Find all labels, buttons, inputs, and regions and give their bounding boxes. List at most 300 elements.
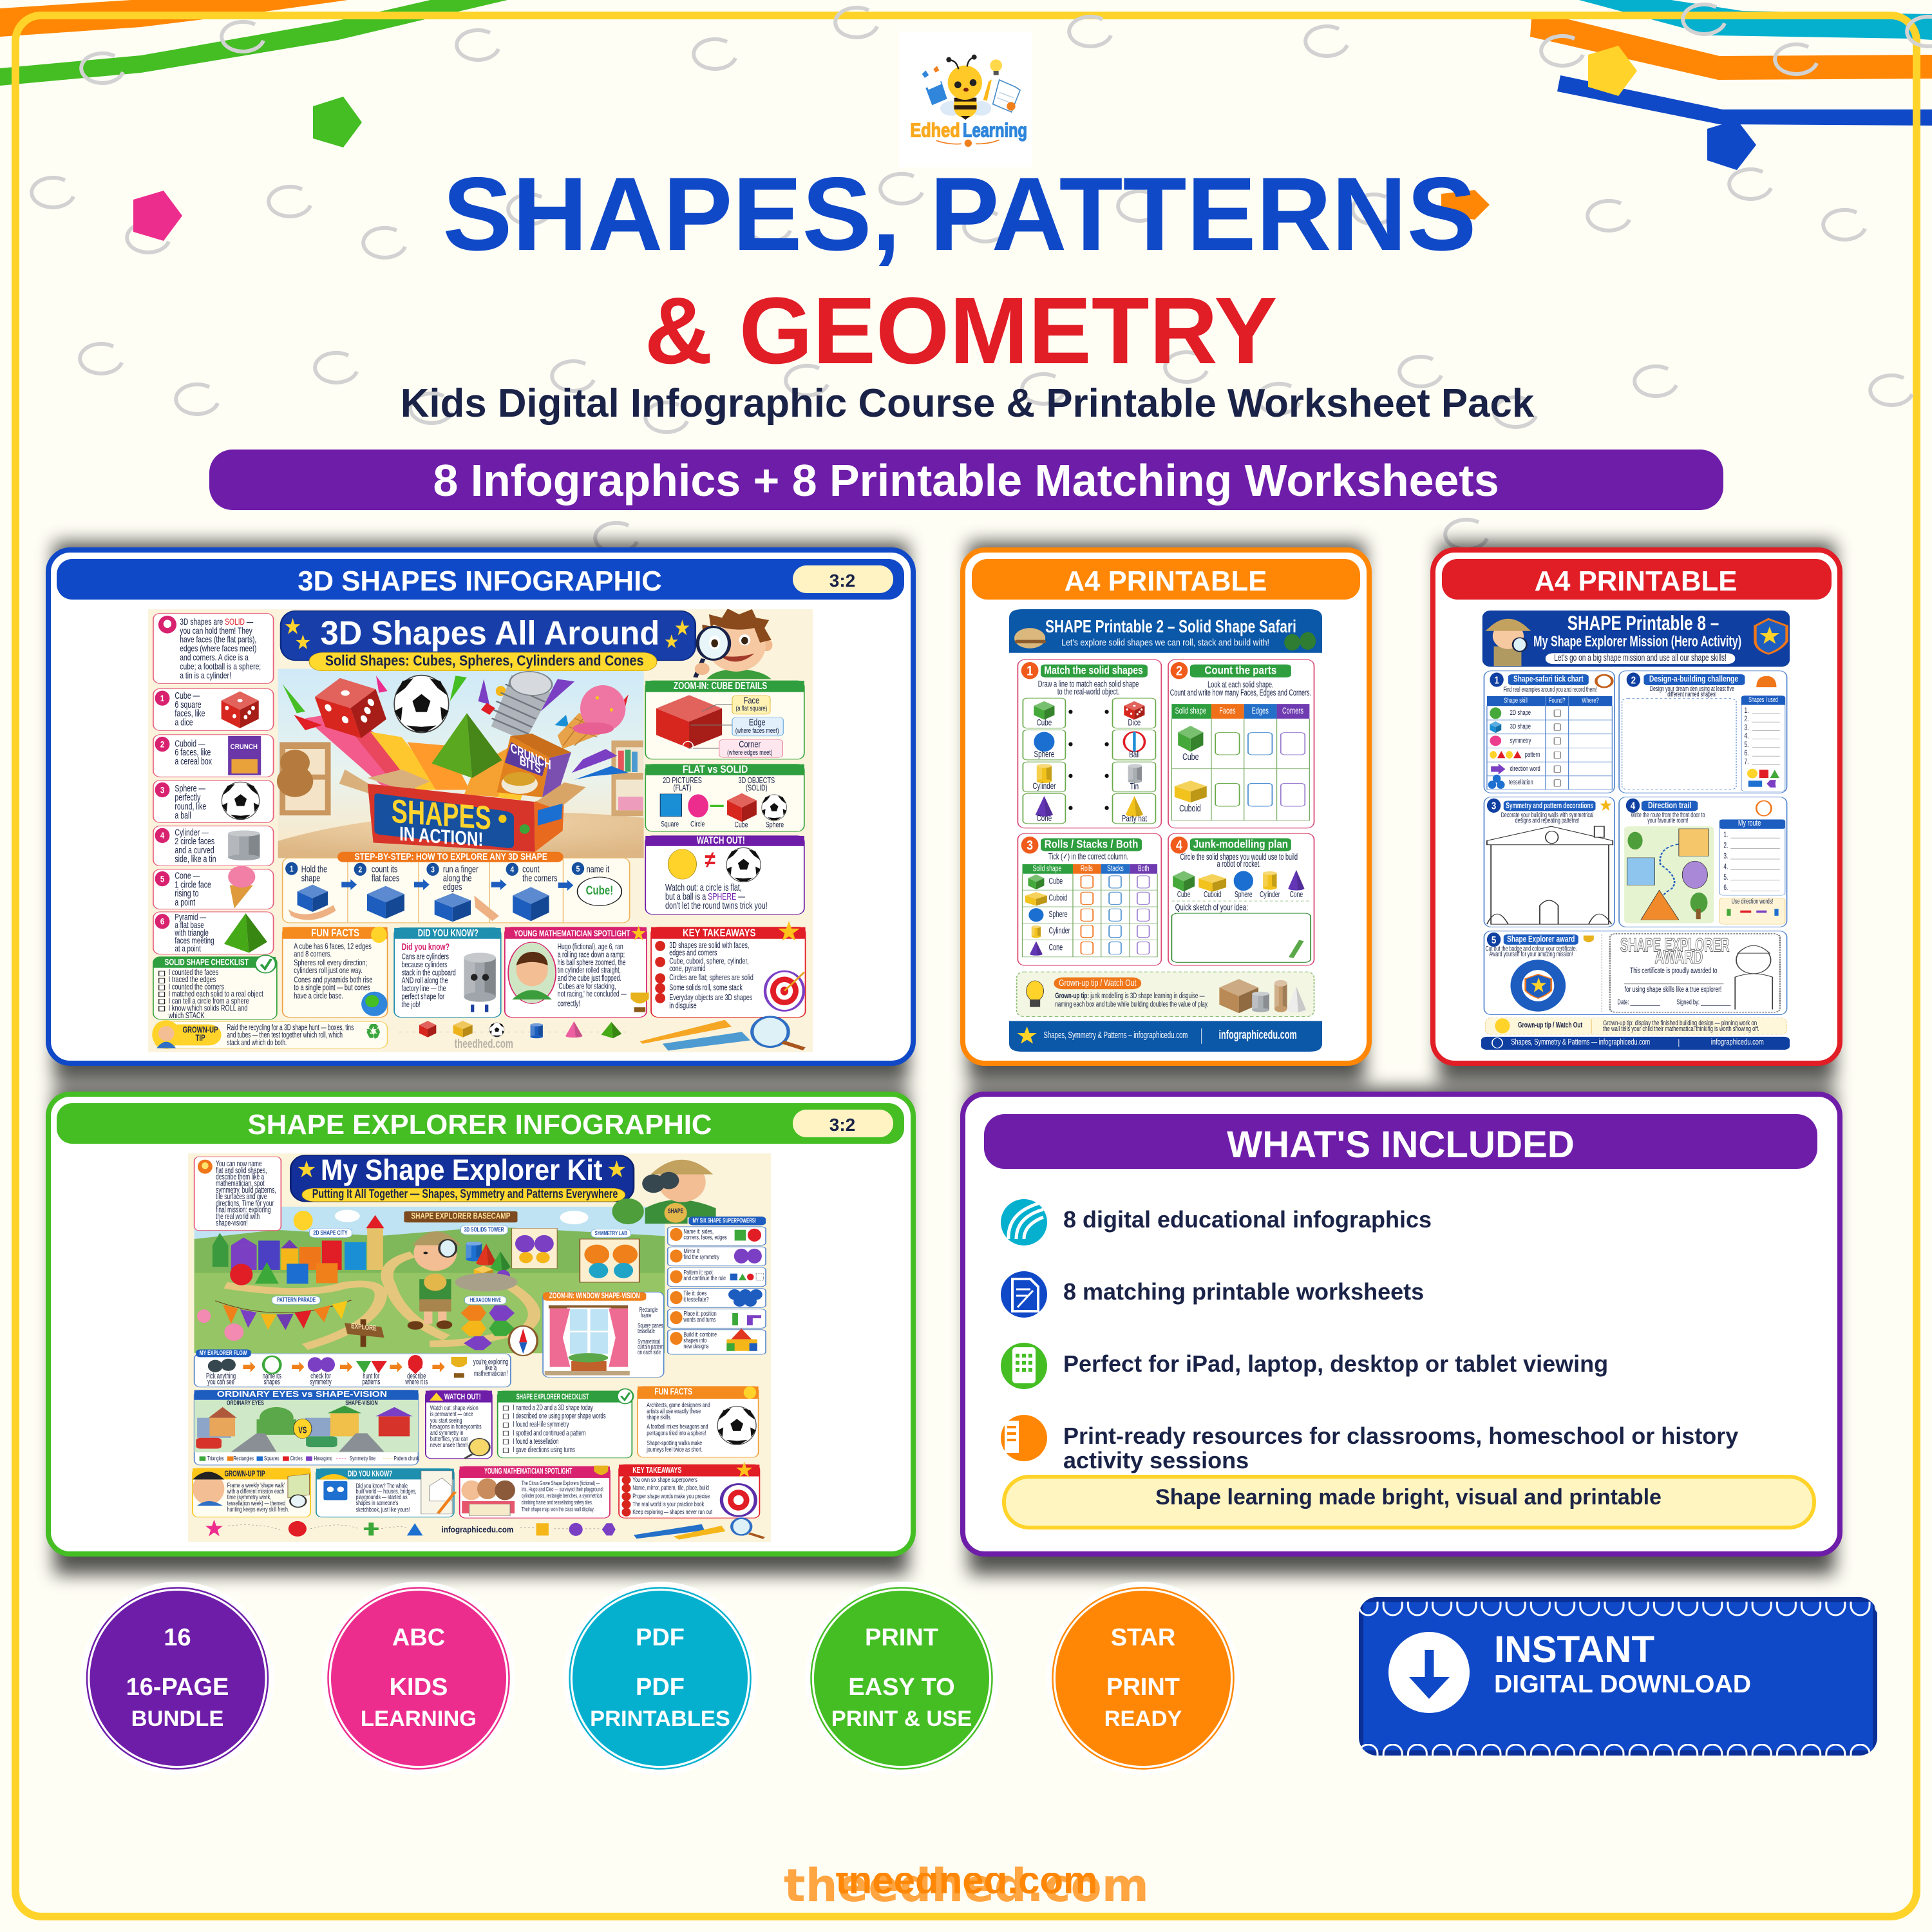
illustration: hexagon hive xyxy=(460,1305,515,1350)
task 1: tick chart: Found? xyxy=(1549,697,1566,704)
icon: tablet xyxy=(1001,1343,1047,1389)
task 4: direction trail: 4 xyxy=(1631,801,1636,812)
panel: spotlight: a rolling race down a ramp: xyxy=(558,951,625,960)
item text: 8 matching printable worksheets xyxy=(1063,1278,1424,1305)
task 5: explorer award: AWARD xyxy=(1654,946,1703,968)
panel: watch out: butterflies, you can xyxy=(430,1435,468,1443)
panel: ordinary eyes vs shape-vision: Pattern chunk xyxy=(394,1455,419,1462)
badge: print ready xyxy=(1046,1582,1240,1775)
task 2: count the parts: 2 xyxy=(1176,663,1182,679)
panel: explorer flow: shapes xyxy=(264,1378,280,1387)
panel: cube: 6 square xyxy=(175,699,202,710)
icon: wifi arcs xyxy=(1001,1199,1047,1245)
panel: explorer flow: symmetry xyxy=(310,1378,332,1387)
task 4: direction trail: your favourite room! xyxy=(1647,817,1689,824)
task 4: junk modelling plan: Circle the solid shapes you would use to build xyxy=(1180,852,1298,862)
panel: six shape superpowers: Pattern it: spot xyxy=(683,1269,713,1276)
panel: fun facts: Cones and pyramids both rise xyxy=(294,976,372,985)
task 3: rolls, stacks, both: Cuboid xyxy=(1049,893,1067,903)
badge: easy to print: EASY TO xyxy=(848,1674,955,1701)
panel: spotlight: correctly! xyxy=(558,999,580,1009)
panel: six shape superpowers: Name it: sides, xyxy=(683,1227,714,1235)
task 3: symmetry decorations: designs and repeating patterns! xyxy=(1515,817,1579,824)
panel: flat vs solid: 2D PICTURES xyxy=(663,777,702,785)
task 4: direction trail: Write the route from the front door to xyxy=(1631,811,1705,819)
panel: fun facts: pentagons tiled into a sphere! xyxy=(647,1429,706,1437)
task 3: symmetry decorations: Symmetry and pattern decorations xyxy=(1506,801,1593,810)
card header xyxy=(57,559,904,600)
panel: intro fact: cube; a football is a sphere; xyxy=(180,661,261,672)
panel: step-by-step: 1 xyxy=(290,865,294,874)
worksheet footer: infographicedu.com xyxy=(1711,1037,1764,1046)
illustration: explorer with binoculars: SHAPE xyxy=(668,1207,683,1215)
panel: intro fact: 3D shapes are SOLID — xyxy=(180,616,253,627)
panel: checklist: I found a tessellation xyxy=(513,1437,558,1446)
panel: step-by-step: flat faces xyxy=(372,873,400,884)
panel: intro fact: and corners. A dice is a xyxy=(180,652,249,663)
panel: intro fact: describe them like a xyxy=(216,1173,264,1182)
badge: pdf printables: PDF xyxy=(636,1674,685,1701)
grown-up tip xyxy=(1485,1018,1787,1034)
panel: grown-up tip: Raid the recycling for a 3D shape hunt — boxes, tins xyxy=(227,1023,354,1032)
panel: flat vs solid: (FLAT) xyxy=(674,784,691,793)
grown-up tip: Grown-up tip / Watch Out xyxy=(1059,978,1137,988)
badge: print ready: READY xyxy=(1104,1707,1182,1731)
panel: spotlight: and the cube just flopped. xyxy=(558,974,621,983)
task 2: design a building: 2 xyxy=(1631,675,1636,687)
ratio pill: 3:2 xyxy=(829,571,855,591)
panel: explorer flow: describe xyxy=(407,1372,426,1381)
panel: zoom-in window: Rectangle xyxy=(639,1305,658,1313)
panel: key takeaways: You own six shape superpowers xyxy=(632,1476,697,1484)
task 4: junk modelling plan: Sphere xyxy=(1235,891,1253,900)
panel: explorer flow: you're exploring xyxy=(473,1358,508,1367)
icon: printed resources xyxy=(1001,1415,1047,1461)
worksheet thumbnail xyxy=(1481,611,1790,1050)
panel: did you know xyxy=(316,1469,455,1517)
panel: spotlight: The Citrus Grove Shape Explorers (fictional) — xyxy=(522,1480,600,1486)
footer shapes trail xyxy=(399,1017,804,1051)
footer shapes trail xyxy=(205,1519,764,1540)
panel: step-by-step: name it xyxy=(587,864,610,875)
panel: six shape superpowers: find the symmetry xyxy=(683,1253,719,1261)
panel: cone: 5 xyxy=(160,874,164,884)
panel: step-by-step: 3 xyxy=(431,866,435,875)
task 1: match the solid shapes: Cylinder xyxy=(1032,781,1056,791)
panel: checklist: I found real-life symmetry xyxy=(513,1421,569,1429)
panel: explorer flow: hunt for xyxy=(363,1372,380,1381)
grown-up tip: Grown-up tip / Watch Out xyxy=(1518,1021,1583,1030)
panel: cube: Cube — xyxy=(175,690,200,701)
task 2: count the parts: Corners xyxy=(1282,706,1303,715)
illustration: cereal box xyxy=(497,734,571,797)
title banner: My Shape Explorer Kit xyxy=(321,1154,603,1187)
panel: step-by-step: run a finger xyxy=(443,864,478,875)
panel: spotlight: Hugo (fictional), age 6, ran xyxy=(558,943,623,952)
worksheet footer xyxy=(1009,1021,1322,1052)
panel: grown-up tip: time (symmetry week, xyxy=(227,1493,271,1501)
panel: grown-up tip: hunting keeps every skill fresh. xyxy=(227,1506,289,1513)
task 2: count the parts: Count and write how many Faces, Edges and Corners. xyxy=(1170,688,1311,697)
panel: spotlight: cylinder posts, rectangle benches, a symmetrical xyxy=(522,1492,603,1499)
panel: six shape superpowers: corners, faces, edges xyxy=(683,1233,727,1241)
panel: checklist: I named a 2D and a 3D shape today xyxy=(513,1404,593,1412)
panel: step-by-step: edges xyxy=(443,881,462,893)
task 1: match the solid shapes: Ball xyxy=(1129,750,1140,760)
panel: key takeaways: Proper shape words make you precise xyxy=(632,1492,710,1500)
worksheet footer: Shapes, Symmetry & Patterns – infographicedu.com xyxy=(1044,1030,1188,1040)
panel: intro fact xyxy=(153,613,274,683)
panel: key takeaways: Circles are flat; spheres are solid xyxy=(669,973,753,982)
panel: sphere: a ball xyxy=(175,810,191,821)
camp scene: 3D SOLIDS TOWER xyxy=(464,1226,504,1233)
panel: zoom-in window: Symmetrical xyxy=(638,1338,660,1345)
logo: Edhed Learning bee: Edhed xyxy=(910,119,960,141)
panel: pyramid: Pyramid — xyxy=(175,912,206,922)
task 1: tick chart: 3D shape xyxy=(1510,723,1531,730)
panel: cube: faces, like xyxy=(175,708,205,719)
panel: intro fact: symmetry, build patterns, xyxy=(216,1186,276,1195)
callout banner: Shape learning made bright, visual and printable xyxy=(1155,1485,1662,1510)
panel: key takeaways: in disguise xyxy=(669,1001,697,1010)
panel: step-by-step: the corners xyxy=(522,873,558,884)
task 2: design a building: 4. xyxy=(1745,732,1748,741)
panel: sphere: 3 xyxy=(160,785,164,795)
illustration: explorer with binoculars xyxy=(612,1160,716,1224)
panel: cuboid: 2 xyxy=(160,739,164,750)
icon: worksheet xyxy=(1001,1271,1047,1318)
panel: spotlight: Their shape map won the class wall display. xyxy=(522,1506,594,1513)
task 5: explorer award: 5 xyxy=(1492,935,1496,946)
panel: cube: a dice xyxy=(175,717,193,728)
panel: six shape superpowers: words and turns xyxy=(683,1316,716,1323)
panel: ordinary eyes vs shape-vision: Hexagons xyxy=(314,1455,332,1462)
panel: cube: 1 xyxy=(160,694,164,703)
panel: flat vs solid: Square xyxy=(661,821,679,829)
panel: did you know: DID YOU KNOW? xyxy=(348,1470,392,1479)
panel: pyramid: a flat base xyxy=(175,920,204,930)
panel: zoom-in cube details: (where edges meet) xyxy=(727,749,772,756)
title xyxy=(442,156,1477,384)
task 4: direction trail: 2. xyxy=(1723,842,1728,850)
task 3: rolls, stacks, both: Sphere xyxy=(1049,909,1068,919)
panel: zoom-in window: ZOOM-IN: WINDOW SHAPE-VISION xyxy=(549,1291,640,1300)
panel: spotlight xyxy=(460,1466,610,1518)
panel: fun facts: to a single point — but cones xyxy=(294,983,370,992)
task 1: tick chart: Shape skill xyxy=(1504,697,1528,704)
worksheet header xyxy=(1009,609,1322,653)
title: SHAPES, PATTERNS xyxy=(442,156,1477,272)
panel: checklist: I counted the corners xyxy=(169,983,224,992)
illustration: colourful city xyxy=(213,1215,384,1285)
card header xyxy=(57,1103,904,1144)
panel: fun facts: FUN FACTS xyxy=(654,1386,692,1397)
footer brand: theedhed.com xyxy=(836,1859,1097,1902)
task 2: design a building: 6. xyxy=(1745,750,1748,757)
panel: fun facts: Spheres roll every direction; xyxy=(294,959,367,967)
task 1: tick chart: direction word xyxy=(1510,765,1540,772)
worksheet header: SHAPE Printable 2 – Solid Shape Safari xyxy=(1045,617,1296,636)
download label: DIGITAL DOWNLOAD xyxy=(1494,1671,1751,1698)
task 1: match the solid shapes: Dice xyxy=(1128,717,1141,728)
panel: six shape superpowers xyxy=(668,1217,766,1354)
footer brand: theedhed.com xyxy=(784,1859,1149,1912)
decorative pentagons xyxy=(133,46,1756,241)
ratio pill xyxy=(793,1110,893,1137)
panel: cuboid xyxy=(153,735,274,777)
badge: kids learning xyxy=(322,1582,515,1775)
basecamp sign: SHAPE EXPLORER BASECAMP xyxy=(411,1211,510,1221)
task 1: match the solid shapes: to the real-world object. xyxy=(1057,687,1119,697)
task 3: rolls, stacks, both: Cone xyxy=(1049,942,1063,952)
illustration: solids tower xyxy=(455,1242,517,1291)
worksheet header: Let's explore solid shapes we can roll, stack and build with! xyxy=(1061,638,1269,648)
card header xyxy=(1442,559,1832,600)
task 3: rolls, stacks, both: Tick (✓) in the correct column. xyxy=(1048,852,1128,862)
panel: flat vs solid: Sphere xyxy=(766,822,784,829)
panel: checklist: SHAPE EXPLORER CHECKLIST xyxy=(516,1392,589,1401)
panel: did you know: DID YOU KNOW? xyxy=(418,927,478,938)
task 5: explorer award xyxy=(1484,931,1787,1014)
panel: did you know: stack in the cupboard xyxy=(402,969,456,978)
panel: grown-up tip: GROWN-UP TIP xyxy=(224,1470,265,1479)
panel: pyramid: with triangle xyxy=(175,927,209,938)
panel: cuboid: Cuboid — xyxy=(175,737,205,749)
task 2: count the parts: Cuboid xyxy=(1179,802,1201,813)
badge: pdf printables: PRINTABLES xyxy=(590,1707,730,1731)
panel: pyramid: 6 xyxy=(160,917,164,927)
panel: intro fact: have faces (the flat parts), xyxy=(180,634,256,645)
panel: ordinary eyes vs shape-vision: ORDINARY EYES vs SHAPE-VISION xyxy=(217,1390,387,1399)
panel: checklist: I know which solids ROLL and xyxy=(169,1004,247,1013)
worksheet footer: Shapes, Symmetry & Patterns — infographicedu.com xyxy=(1511,1037,1650,1046)
card shadows xyxy=(54,542,1835,1575)
panel: explorer flow xyxy=(194,1349,511,1387)
panel: did you know: playgrounds — started as xyxy=(356,1493,408,1501)
panel: ordinary eyes vs shape-vision: Rectangles xyxy=(233,1455,254,1462)
panel: step-by-step: along the xyxy=(443,873,471,884)
panel: explorer flow: where it is xyxy=(405,1378,428,1387)
infographic thumbnail xyxy=(148,609,813,1052)
panel: fun facts xyxy=(638,1386,759,1457)
panel: pyramid xyxy=(153,912,274,954)
badge: kids learning: ABC xyxy=(392,1624,445,1651)
panel: intro fact: a tin is a cylinder! xyxy=(180,670,231,681)
card: 3D shapes infographic xyxy=(48,550,913,1063)
item text: Perfect for iPad, laptop, desktop or tablet viewing xyxy=(1063,1350,1608,1377)
panel: key takeaways xyxy=(651,921,806,1017)
panel: six shape superpowers: Mirror it: xyxy=(683,1247,700,1255)
panel: key takeaways: 3D shapes are solid with faces, xyxy=(669,942,749,951)
ratio pill xyxy=(793,565,893,593)
task 3: rolls, stacks, both: Cube xyxy=(1049,876,1063,886)
panel: fun facts: FUN FACTS xyxy=(311,927,359,939)
panel: intro fact: tile surfaces and give xyxy=(216,1193,267,1202)
badge: easy to print xyxy=(805,1582,998,1775)
worksheet footer xyxy=(1481,1037,1790,1050)
task 4: direction trail: Direction trail xyxy=(1648,800,1691,810)
panel: watch out: is permanent — once xyxy=(430,1410,473,1418)
task 3: symmetry decorations: Decorate your building walls with symmetrical xyxy=(1501,811,1593,819)
panel: intro fact: edges (where faces meet) xyxy=(180,643,256,654)
panel: zoom-in window: frame xyxy=(641,1311,652,1319)
task 2: design a building xyxy=(1619,671,1787,793)
task 1: tick chart: Shape-safari tick chart xyxy=(1513,674,1584,684)
task 1: tick chart: symmetry xyxy=(1510,737,1531,744)
panel: key takeaways xyxy=(619,1462,759,1518)
panel: cube xyxy=(153,688,274,730)
panel: zoom-in cube details: Edge xyxy=(749,717,766,728)
panel: did you know xyxy=(394,927,501,1017)
item text: 8 digital educational infographics xyxy=(1063,1206,1432,1233)
panel: grown-up tip: tessellation week) — themed xyxy=(227,1499,285,1507)
panel: fun facts: journeys feel twice as short. xyxy=(646,1446,703,1454)
task 1: tick chart: Where? xyxy=(1582,697,1599,704)
panel: fun facts: cylinders roll just one way. xyxy=(294,967,363,976)
task 1: tick chart xyxy=(1484,671,1615,793)
panel: intro fact: mathematician, spot xyxy=(216,1179,265,1188)
panel: key takeaways: Name, mirror, pattern, tile, place, build xyxy=(632,1484,709,1492)
panel: zoom-in window: on each side xyxy=(638,1348,661,1356)
grown-up tip xyxy=(1017,972,1314,1016)
panel: cone: 1 circle face xyxy=(175,879,211,890)
download label: INSTANT xyxy=(1494,1629,1654,1671)
panel: intro fact: flat and solid shapes, xyxy=(216,1166,267,1175)
panel: step-by-step xyxy=(283,851,630,923)
panel: cone: a point xyxy=(175,896,196,907)
callout banner xyxy=(1004,1477,1814,1528)
panel: watch out: WATCH OUT! xyxy=(697,834,745,846)
card header: WHAT'S INCLUDED xyxy=(1227,1124,1575,1166)
central scene xyxy=(277,667,644,858)
panel: step-by-step: 2 xyxy=(358,866,363,875)
panel: step-by-step: 5 xyxy=(576,865,580,874)
badge: easy to print: PRINT xyxy=(865,1624,938,1651)
panel: spotlight: Iris, Hugo and Cleo — surveyed their playground: xyxy=(522,1486,603,1493)
panel: intro fact: you can hold them! They xyxy=(180,625,253,636)
panel: sphere: Sphere — xyxy=(175,782,205,794)
panel: cuboid: 6 faces, like xyxy=(175,746,211,758)
panel: grown-up tip: ♻ xyxy=(366,1021,381,1043)
panel: grown-up tip: Frame a weekly 'shape walk' xyxy=(227,1481,285,1489)
panel: explorer flow: mathematician! xyxy=(474,1370,507,1378)
panel: ordinary eyes vs shape-vision: Squares xyxy=(264,1455,279,1462)
illustration: cereal box: CRUNCH xyxy=(511,739,551,772)
panel: six shape superpowers: new designs xyxy=(683,1342,709,1350)
panel: cylinder: 2 circle faces xyxy=(175,835,214,847)
panel: watch out: but a ball is a SPHERE — xyxy=(665,891,745,902)
task 2: design a building: 1. xyxy=(1745,707,1748,715)
panel: cylinder: Cylinder — xyxy=(175,827,209,838)
panel: checklist: I gave directions using turns xyxy=(513,1446,575,1454)
task 4: direction trail: 1. xyxy=(1723,831,1728,840)
panel: spotlight: 'Cubes are for stacking, xyxy=(558,982,616,991)
panel: cuboid: a cereal box xyxy=(175,755,213,767)
camp scene xyxy=(194,1207,665,1356)
panel: checklist: I spotted and continued a pattern xyxy=(513,1429,586,1437)
panel: cuboid: CRUNCH xyxy=(231,743,258,751)
task 2: count the parts: Edges xyxy=(1252,706,1269,715)
panel: cylinder: 4 xyxy=(160,831,164,840)
panel: intro fact: directions. Time for your xyxy=(216,1199,274,1208)
title banner: Putting It All Together — Shapes, Symmetry and Patterns Everywhere xyxy=(312,1187,618,1200)
panel: six shape superpowers: Place it: position xyxy=(683,1310,717,1318)
task 3: rolls, stacks, both: Stacks xyxy=(1107,864,1124,873)
panel: step-by-step: count xyxy=(522,864,540,875)
task 5: explorer award: This certificate is proudly awarded to xyxy=(1630,967,1718,975)
panel: zoom-in cube details xyxy=(645,681,804,759)
panel: fun facts: shape skills. xyxy=(647,1414,671,1421)
worksheet header: SHAPE Printable 8 – xyxy=(1567,612,1719,635)
panel: did you know: Did you know? The whole xyxy=(356,1482,408,1490)
task 2: count the parts: Solid shape xyxy=(1175,706,1206,715)
panel: grown-up tip xyxy=(152,1020,388,1049)
task 1: tick chart: 2D shape xyxy=(1510,709,1531,716)
grown-up tip: naming each box and tube while building doubles the value of play. xyxy=(1055,1001,1208,1009)
badge: pdf printables xyxy=(564,1582,757,1775)
task 5: explorer award: SHAPE EXPLORER xyxy=(1620,934,1729,956)
panel: six shape superpowers: shapes into xyxy=(683,1336,706,1344)
panel: watch out: ≠ xyxy=(705,848,715,873)
panel: watch out xyxy=(426,1391,492,1459)
panel: checklist xyxy=(153,955,277,1020)
panel: cone: rising to xyxy=(175,887,198,899)
task 4: direction trail: 4. xyxy=(1723,863,1728,871)
panel: did you know: sketchbook, just like yours! xyxy=(356,1506,410,1513)
panel: zoom-in cube details: Face xyxy=(744,695,759,706)
task 4: direction trail xyxy=(1619,797,1787,927)
panel: step-by-step: STEP-BY-STEP: HOW TO EXPLORE ANY 3D SHAPE xyxy=(355,851,547,862)
badge: kids learning: KIDS xyxy=(390,1674,448,1701)
panel: ordinary eyes vs shape-vision: Triangles xyxy=(207,1455,224,1462)
panel: explorer flow: Pick anything xyxy=(206,1372,236,1381)
panel: key takeaways: KEY TAKEAWAYS xyxy=(683,927,755,939)
panel: watch out: Watch out: shape-vision xyxy=(430,1404,478,1412)
panel: fun facts xyxy=(283,927,388,1017)
panel: sphere: round, like xyxy=(175,800,206,812)
panel: grown-up tip: GROWN-UP xyxy=(182,1025,218,1035)
panel: ordinary eyes vs shape-vision: VS xyxy=(298,1425,307,1435)
panel: watch out: don't let the round twins trick you! xyxy=(665,900,768,911)
item text: activity sessions xyxy=(1063,1447,1249,1473)
logo: Edhed Learning bee xyxy=(899,32,1032,167)
panel: checklist: I described one using proper shape words xyxy=(513,1412,606,1421)
illustration: compass xyxy=(509,1326,537,1356)
panel: checklist: I matched each solid to a real object xyxy=(169,990,263,999)
purple banner: 8 Infographics + 8 Printable Matching Worksheets xyxy=(433,455,1499,506)
panel: explorer flow: like a xyxy=(485,1364,497,1372)
task 2: count the parts: Faces xyxy=(1219,706,1236,715)
panel: watch out: and symmetry in xyxy=(430,1429,463,1436)
panel: spotlight: tin cylinder rolled straight, xyxy=(558,966,621,975)
panel: flat vs solid: Cube xyxy=(735,822,748,829)
panel: cone: Cone — xyxy=(175,870,200,881)
badge: kids learning: LEARNING xyxy=(361,1707,477,1731)
illustration: open box xyxy=(339,770,586,852)
panel: key takeaways: Keep exploring — shapes never run out xyxy=(632,1508,712,1515)
task 2: design a building: 3. xyxy=(1745,724,1748,732)
panel: watch out: never unsee them! xyxy=(430,1441,468,1448)
task 2: design a building: Design-a-building challenge xyxy=(1649,674,1738,684)
panel: flat vs solid: 3D OBJECTS xyxy=(738,777,775,785)
panel: flat vs solid xyxy=(645,764,804,831)
task 2: count the parts xyxy=(1168,659,1314,828)
panel: spotlight xyxy=(505,925,649,1017)
task 1: match the solid shapes: Tin xyxy=(1130,781,1139,791)
panel: did you know: shapes in someone's xyxy=(356,1499,399,1506)
panel: key takeaways: Cube, cuboid, sphere, cylinder, xyxy=(669,957,748,966)
panel: did you know: AND roll along the xyxy=(402,976,448,985)
